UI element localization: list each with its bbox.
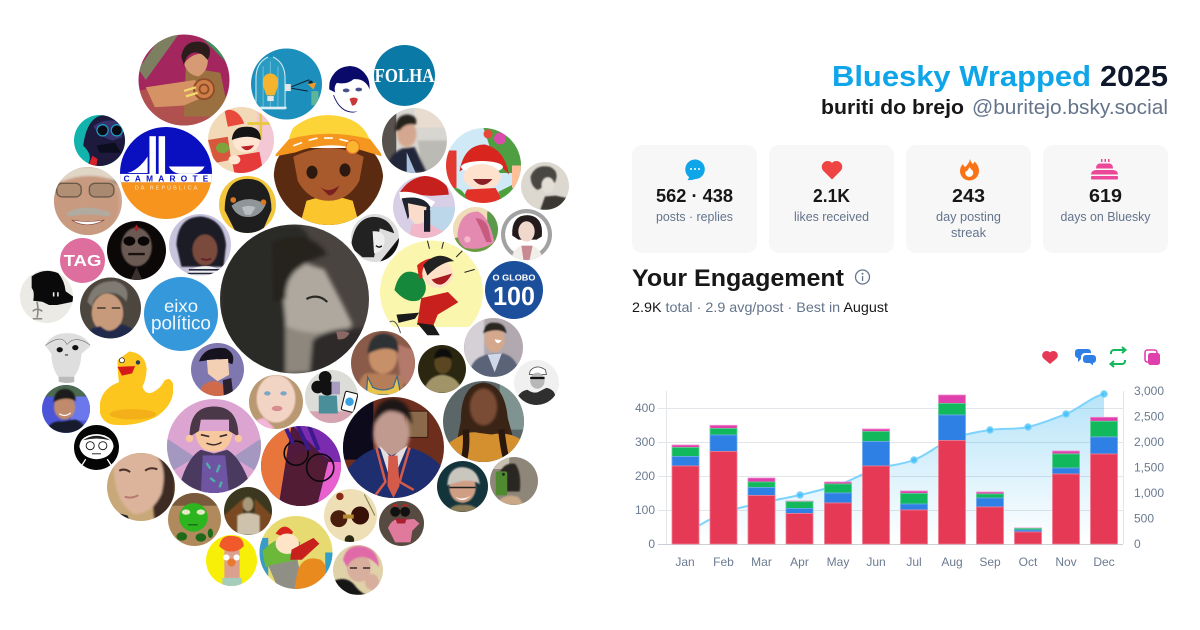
bars: replies [672,415,1118,532]
avatar: black blob on cream [20,270,73,323]
avatar: smiling man with glasses [54,167,122,235]
cumulative line [685,394,1104,531]
avatar: birdcage and bulb [251,48,322,120]
right axis labels: 1,500 [1134,460,1164,474]
right axis labels: 0 [1134,537,1141,551]
avatar: emu [219,176,276,233]
profile name and handle: @buritejo.bsky.social [972,97,1168,119]
avatar: pale woman blue eyes [249,375,303,429]
month labels: Dec [1093,555,1115,569]
stat card: day posting streak: day posting [936,210,1001,224]
icon: chat bubble [685,160,705,180]
month labels: Feb [713,555,734,569]
avatar: pink Pokémon [453,207,498,252]
icon: heart [822,161,842,180]
avatar: pink pig christmas [379,501,424,546]
avatar: woman with short white hair [437,461,488,512]
avatar: TAG logo: TAG [64,253,101,270]
avatar: man in suit [382,108,447,173]
avatar: green toy [168,493,221,546]
stat card: days on Bluesky: 619 [1089,186,1122,206]
right axis labels: 2,500 [1134,410,1164,424]
bars: quotes [672,395,1118,529]
right axis labels: 500 [1134,512,1154,526]
left axis labels: 300 [635,435,655,449]
avatar: illustrated woman [501,209,552,260]
avatar: purple-haired drawing [261,426,341,506]
avatar: Camarote da República logo: CAMAROTE [124,174,209,183]
avatar: Camarote da República logo [120,127,212,219]
avatar: Chico Bento comic [260,516,332,589]
avatar: comic warrior [138,34,230,126]
avatar: black and white glasses cartoon [74,425,119,470]
avatar: Camarote da República logo: DA REPÚBLICA [135,185,198,192]
avatar: man with blue lights [42,385,90,433]
avatar: Eixo Político logo: político [151,314,211,335]
avatar: dark flowers [324,489,377,542]
stat card: days on Bluesky: days on Bluesky [1060,210,1151,224]
avatar: skull makeup [107,221,166,280]
avatar: manga girl santa hat [393,176,455,238]
profile name and handle: buriti do brejo [821,97,964,119]
month labels: Oct [1019,555,1038,569]
month labels: May [827,555,849,569]
stat card: likes received: likes received [794,210,869,224]
avatar: selfie with green phone [490,457,538,505]
avatar: engraved woman [521,162,569,210]
avatar: Mônica comic [208,107,274,173]
avatar: Cebolinha santa running [380,240,483,344]
avatar: O Globo 100 logo: O GLOBO [493,273,536,283]
stat card: likes received [769,145,894,253]
left axis labels [635,401,655,551]
avatar: TAG logo [60,238,105,283]
cumulative points [682,391,1107,534]
bars: reposts [672,404,1118,530]
avatar: large portrait of woman in profile [220,224,369,374]
icon: reposts [1110,347,1126,367]
icon: quotes [1145,350,1160,365]
avatar: selfie woman [107,453,175,521]
avatar: anime character on lilac [167,399,261,493]
stat card: day posting streak: 243 [952,186,985,206]
avatar: smiling man in sweater [464,318,523,377]
avatar: Vader with glasses [74,115,125,166]
profile name and handle [821,97,1168,119]
stat card: days on Bluesky [1043,145,1168,253]
icon: cake [1091,159,1118,180]
title: 2025 [1100,61,1168,93]
avatar: O Globo 100 logo [485,261,543,319]
right axis labels: 2,000 [1134,435,1164,449]
avatar: Eixo Político logo: eixo [164,296,198,316]
icon: likes [1042,351,1058,364]
stat card: posts and replies [632,145,757,253]
avatar: Mickey at desk [305,370,358,423]
avatar: manga sketch [351,214,399,262]
avatar: man in dark photo [418,345,466,393]
avatar: curly-haired woman [169,214,231,276]
avatar: O Globo 100 logo: 100 [493,283,535,311]
avatar: sepia figure [224,487,272,535]
left axis labels: 200 [635,469,655,483]
avatar cluster [20,34,569,595]
left axis labels: 400 [635,401,655,415]
month labels: Apr [790,555,809,569]
stat card: posts and replies: posts · replies [656,210,733,224]
avatar: Eixo Político logo [144,277,218,351]
month labels: Sep [979,555,1001,569]
avatar: manga girl purple [191,343,244,396]
avatar: Strawberry girl with orange hat [274,115,384,225]
left axis labels: 100 [635,503,655,517]
month labels: Jul [906,555,922,569]
avatar: boy in yellow tank top [351,331,415,395]
cumulative area [685,394,1104,544]
avatar: young woman in orange shirt [443,381,524,462]
left axis labels: 0 [648,537,655,551]
stat card: posts and replies: 562 · 438 [656,186,733,206]
legend icons [1042,347,1160,367]
month labels [675,555,1115,569]
stat card: day posting streak: streak [951,226,987,240]
engagement chart [635,384,1164,569]
title: Bluesky Wrapped [832,61,1091,93]
avatar: pink-haired person [333,545,383,595]
month labels: Aug [941,555,963,569]
icon: replies [1075,349,1096,366]
avatar: cartoon face [329,66,370,113]
engagement summary: 2.9K total · 2.9 avg/post · Best in August [632,299,888,315]
stat card: likes received: 2.1K [813,186,850,206]
icon: flame [960,159,979,180]
bars: likes [672,440,1118,544]
avatar: man with gray hair [80,278,141,338]
stat card: day posting streak [906,145,1031,253]
avatar: Beaker puppet [206,535,257,586]
avatar: sketched gray girl [45,333,90,383]
avatar: Mônica santa hat [446,128,521,203]
month labels: Jun [866,555,886,569]
icon: info [856,270,870,284]
heading: your engagement: Your Engagement [632,265,844,292]
month labels: Nov [1055,555,1077,569]
avatar: man in striped blazer [343,397,444,498]
right axis labels: 3,000 [1134,384,1164,398]
right axis labels [1134,384,1164,551]
right axis labels: 1,000 [1134,486,1164,500]
avatar: man with cap black and white [514,360,559,405]
month labels: Jan [675,555,695,569]
avatar: rubber duck [100,352,173,426]
month labels: Mar [751,555,772,569]
avatar: Folha logo [374,45,435,106]
